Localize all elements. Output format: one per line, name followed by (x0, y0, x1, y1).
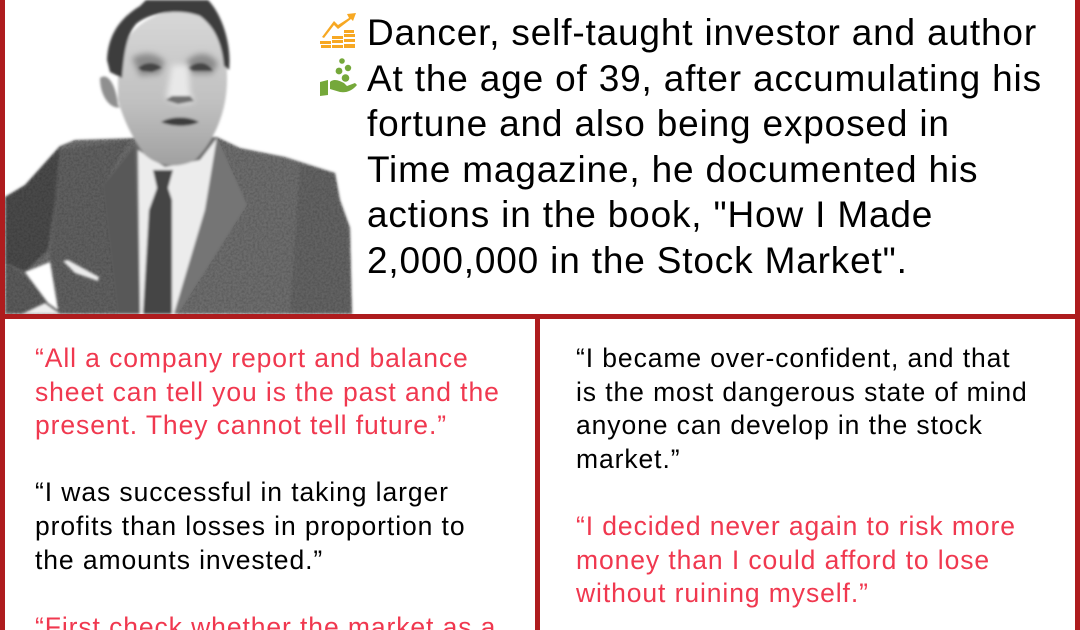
quote: larger profits: “I was successful in taking larger (35, 477, 449, 507)
quote: risk (576, 511, 1016, 608)
quote: over-confident: “I became over-confident, and that (576, 343, 1011, 373)
left border (0, 0, 5, 630)
panel: left quotes (35, 343, 500, 630)
quote: risk: without ruining myself.” (576, 578, 869, 608)
quote: risk: “I decided never again to risk more (576, 511, 1016, 541)
quote: company report (35, 343, 500, 440)
quote: larger profits: profits than losses in proportion to (35, 511, 465, 541)
quote: over-confident: is the most dangerous state of mind (576, 377, 1028, 407)
heading: biography text: 2,000,000 in the Stock Market". (367, 240, 908, 281)
horizontal divider (0, 314, 1080, 319)
quote: company report: “All a company report and balance (35, 343, 469, 373)
quote: over-confident: market.” (576, 444, 680, 474)
heading: biography text: Dancer, self-taught investor and author (367, 12, 1037, 53)
icon: hand with falling coins (320, 58, 357, 96)
heading: biography text: At the age of 39, after accumulating his (367, 58, 1042, 99)
quote: company report: sheet can tell you is the past and the (35, 377, 500, 407)
portrait: man in suit (5, 0, 354, 314)
heading: biography text (367, 12, 1042, 281)
right border (1075, 0, 1080, 630)
heading: biography text: Time magazine, he documented his (367, 149, 978, 190)
quote: risk: money than I could afford to lose (576, 545, 990, 575)
vertical divider (535, 319, 540, 630)
quote: company report: present. They cannot tell future.” (35, 410, 447, 440)
icon: coins and rising arrow (320, 13, 356, 48)
heading: biography text: fortune and also being exposed in (367, 103, 950, 144)
panel: right quotes (576, 343, 1028, 608)
quote: over-confident (576, 343, 1028, 474)
heading: biography text: actions in the book, "How I Made (367, 194, 933, 235)
quote: larger profits (35, 477, 465, 575)
quote: larger profits: the amounts invested.” (35, 545, 323, 575)
quote: over-confident: anyone can develop in the stock (576, 410, 983, 440)
